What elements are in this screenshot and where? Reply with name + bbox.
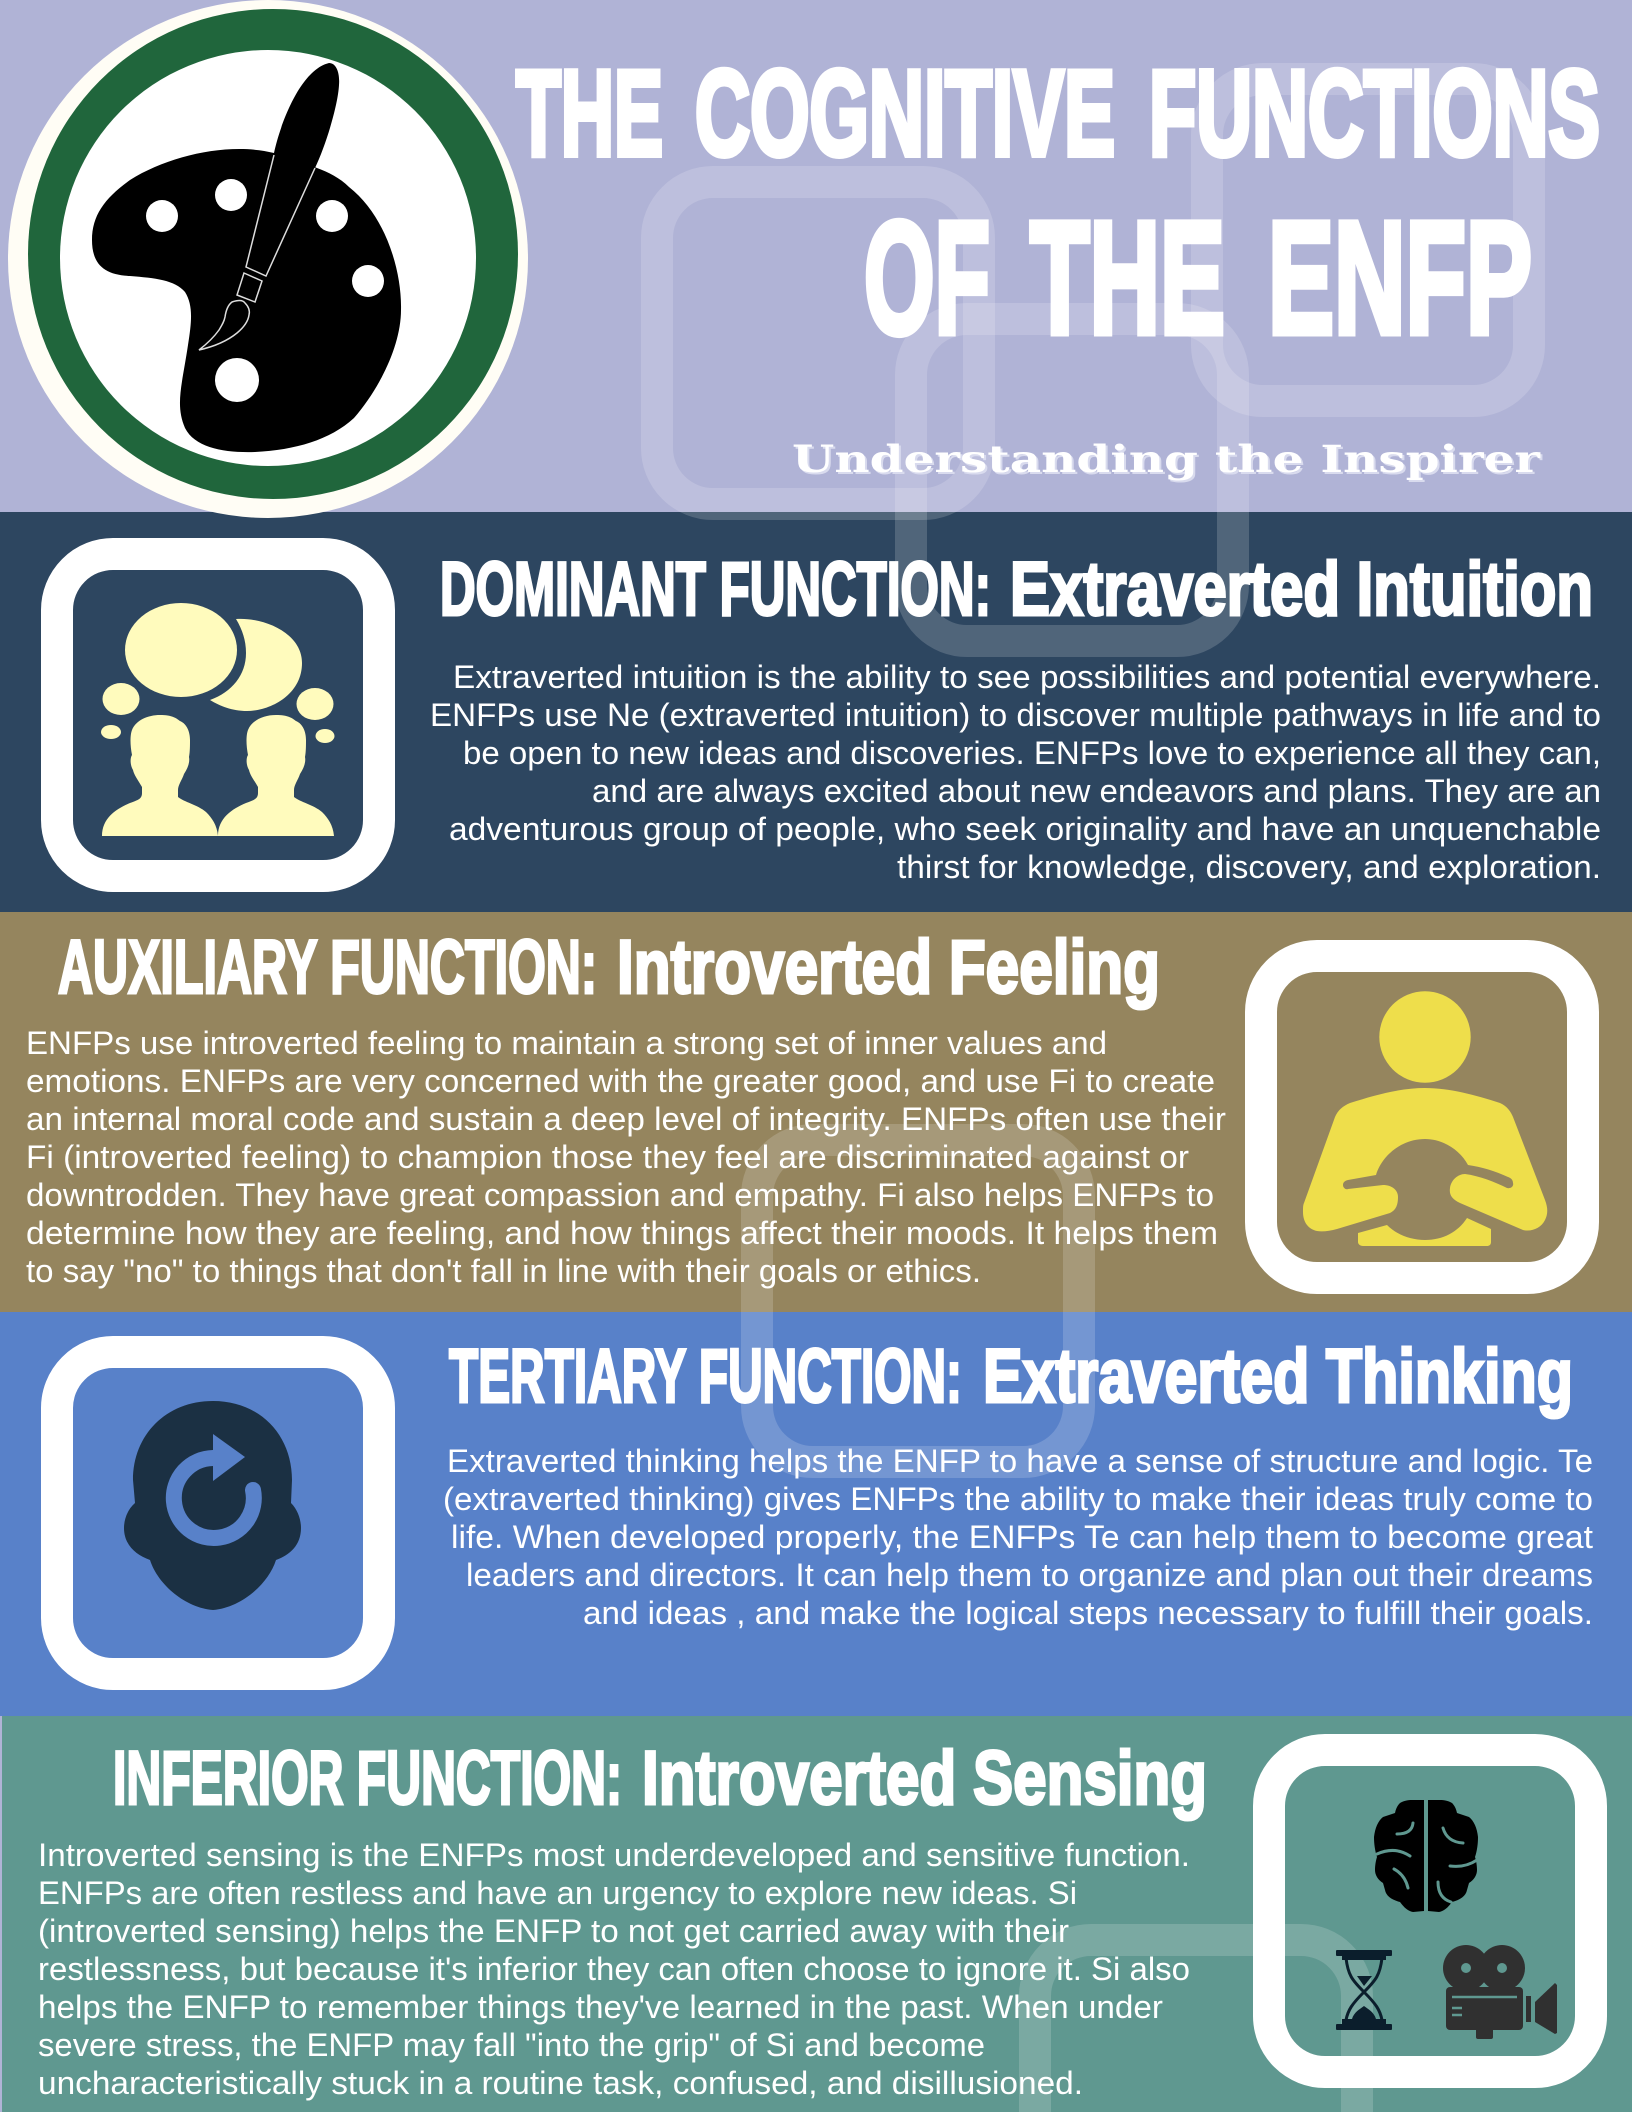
heading: inferior function: Introverted Sensing xyxy=(642,1736,1207,1821)
text block: auxiliary function description xyxy=(26,1025,1226,1289)
heading: dominant function: DOMINANT FUNCTION: xyxy=(440,547,991,632)
text block: inferior function description xyxy=(38,1837,1190,2101)
text block: dominant function description: adventurous group of people, who seek originality and have an unquenchable xyxy=(449,811,1601,847)
icon: hourglass xyxy=(1336,1950,1392,2030)
subtitle: Understanding the Inspirer xyxy=(792,437,1541,481)
panel: dominant function band xyxy=(0,512,1632,912)
icon: two people thinking xyxy=(57,554,379,876)
text block: auxiliary function description: ENFPs use introverted feeling to maintain a strong set of inner values and xyxy=(26,1025,1107,1061)
title xyxy=(516,45,1600,367)
panel: auxiliary function content xyxy=(26,925,1583,1289)
icon group: brain, hourglass and film camera xyxy=(1269,1750,1591,2072)
title: OF xyxy=(864,188,990,367)
heading: inferior function: INFERIOR FUNCTION: xyxy=(113,1736,622,1821)
panel: header band xyxy=(0,0,1632,512)
panel: tertiary function content xyxy=(57,1334,1593,1674)
text block: inferior function description: severe stress, the ENFP may fall "into the grip" of Si and become xyxy=(38,2027,985,2063)
text block: tertiary function description: (extraverted thinking) gives ENFPs the ability to make their ideas truly come to xyxy=(443,1481,1593,1517)
text block: tertiary function description: leaders and directors. It can help them to organize and plan out their dreams xyxy=(466,1557,1593,1593)
text block: dominant function description: and are always excited about new endeavors and plans. They are an xyxy=(592,773,1601,809)
panel: tertiary function band xyxy=(0,1312,1632,1716)
text block: tertiary function description xyxy=(443,1443,1593,1631)
panel: inferior function content xyxy=(38,1736,1591,2101)
panel: auxiliary function band xyxy=(0,912,1632,1312)
text block: inferior function description: restlessness, but because it's inferior they can often choose to ignore it. Si also xyxy=(38,1951,1190,1987)
heading: tertiary function: TERTIARY FUNCTION: xyxy=(449,1334,962,1419)
text block: dominant function description: be open to new ideas and discoveries. ENFPs love to experience all they can, xyxy=(463,735,1601,771)
text block: auxiliary function description: Fi (introverted feeling) to champion those they feel are discriminated against or xyxy=(26,1139,1189,1175)
panel: inferior function band xyxy=(0,1716,1632,2112)
heading: auxiliary function: AUXILIARY FUNCTION: xyxy=(58,925,597,1010)
icon: person holding steering wheel xyxy=(1261,956,1583,1278)
text block: dominant function description: Extraverted intuition is the ability to see possibilities and potential everywhere. xyxy=(453,659,1601,695)
title: THE xyxy=(1030,188,1225,367)
text block: dominant function description xyxy=(430,659,1601,885)
text block: dominant function description: ENFPs use Ne (extraverted intuition) to discover multiple pathways in life and to xyxy=(430,697,1601,733)
icon: film camera xyxy=(1443,1945,1557,2039)
text block: tertiary function description: and ideas , and make the logical steps necessary to fulfill their goals. xyxy=(583,1595,1593,1631)
panel: dominant function content xyxy=(57,547,1601,885)
text block: inferior function description: uncharacteristically stuck in a routine task, confused, and disillusioned. xyxy=(38,2065,1083,2101)
icon: brain xyxy=(1374,1800,1478,1912)
text block: auxiliary function description: an internal moral code and sustain a deep level of integrity. ENFPs often use their xyxy=(26,1101,1226,1137)
text block: tertiary function description: life. When developed properly, the ENFPs Te can help them to become great xyxy=(451,1519,1593,1555)
text block: inferior function description: ENFPs are often restless and have an urgency to explore new ideas. Si xyxy=(38,1875,1077,1911)
text block: inferior function description: helps the ENFP to remember things they've learned in the past. When under xyxy=(38,1989,1163,2025)
text block: auxiliary function description: determine how they are feeling, and how things affect their moods. It helps them xyxy=(26,1215,1218,1251)
text block: auxiliary function description: emotions. ENFPs are very concerned with the greater good, and use Fi to create xyxy=(26,1063,1215,1099)
text block: auxiliary function description: downtrodden. They have great compassion and empathy. Fi also helps ENFPs to xyxy=(26,1177,1214,1213)
title: COGNITIVE xyxy=(695,45,1115,181)
icon: head with rotating arrow xyxy=(57,1352,379,1674)
title: THE xyxy=(516,45,663,181)
text block: inferior function description: (introverted sensing) helps the ENFP to not get carried away with their xyxy=(38,1913,1069,1949)
text block: tertiary function description: Extraverted thinking helps the ENFP to have a sense of structure and logic. Te xyxy=(447,1443,1593,1479)
text block: auxiliary function description: to say "no" to things that don't fall in line with their goals or ethics. xyxy=(26,1253,981,1289)
heading: auxiliary function: Introverted Feeling xyxy=(617,925,1160,1010)
text block: inferior function description: Introverted sensing is the ENFPs most underdeveloped and sensitive function. xyxy=(38,1837,1190,1873)
text block: dominant function description: thirst for knowledge, discovery, and exploration. xyxy=(897,849,1601,885)
icon: artist palette logo xyxy=(8,0,528,518)
